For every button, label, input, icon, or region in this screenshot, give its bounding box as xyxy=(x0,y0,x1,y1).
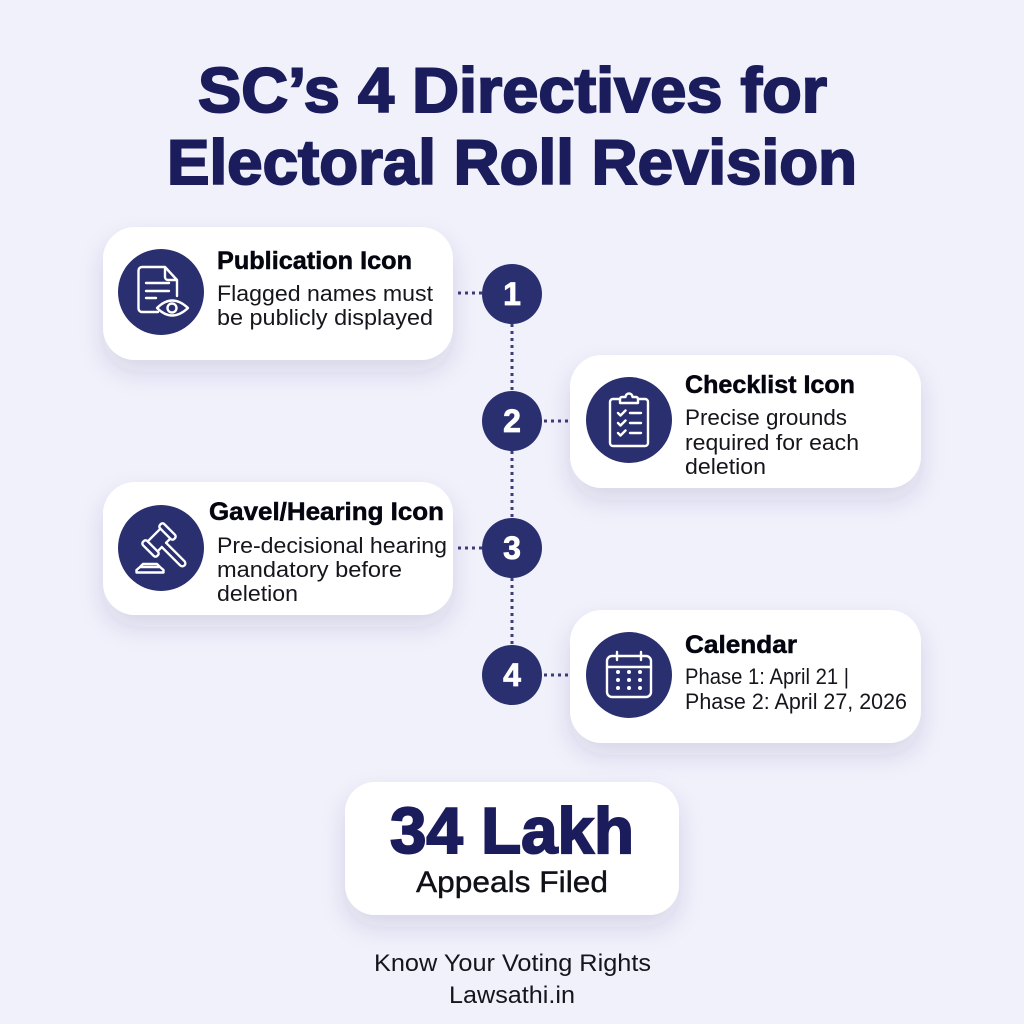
heading: Publication Icon xyxy=(217,247,412,275)
description: Phase 2: April 27, 2026 xyxy=(685,689,907,714)
title xyxy=(167,56,857,198)
step number 1 xyxy=(482,264,542,324)
description xyxy=(217,281,433,330)
description: be publicly displayed xyxy=(217,305,433,330)
panel: hearing xyxy=(103,482,453,615)
description: required for each xyxy=(685,430,859,455)
icon: document with eye xyxy=(118,249,204,335)
step number 2 xyxy=(482,391,542,451)
description: deletion xyxy=(217,581,298,606)
heading: Checklist Icon xyxy=(685,371,855,399)
heading: Calendar xyxy=(685,631,797,659)
description: mandatory before xyxy=(217,557,402,582)
description: Phase 1: April 21 | xyxy=(685,664,849,689)
step number 2: 2 xyxy=(503,403,521,439)
footer text: Lawsathi.in xyxy=(449,982,575,1009)
panel: appeals stat xyxy=(345,782,679,915)
step number 4: 4 xyxy=(503,657,521,693)
title: Electoral Roll Revision xyxy=(167,128,857,198)
stat label: Appeals Filed xyxy=(416,866,608,899)
stat number: 34 Lakh xyxy=(390,794,634,867)
step number 3: 3 xyxy=(503,530,521,566)
description: Flagged names must xyxy=(217,281,433,306)
icon: calendar xyxy=(586,632,672,718)
timeline connector xyxy=(458,293,570,675)
panel: calendar xyxy=(570,610,921,743)
footer text xyxy=(374,950,651,1009)
description: Precise grounds xyxy=(685,405,847,430)
description xyxy=(685,664,907,714)
description xyxy=(217,533,447,606)
description: Pre-decisional hearing xyxy=(217,533,447,558)
panel: publication xyxy=(103,227,453,360)
step number 1: 1 xyxy=(503,276,521,312)
step number 3 xyxy=(482,518,542,578)
footer text: Know Your Voting Rights xyxy=(374,950,651,977)
description xyxy=(685,405,859,479)
heading: Gavel/Hearing Icon xyxy=(209,498,444,526)
description: deletion xyxy=(685,454,766,479)
icon: clipboard checklist xyxy=(586,377,672,463)
title: SC’s 4 Directives for xyxy=(198,56,827,126)
step number 4 xyxy=(482,645,542,705)
icon: gavel xyxy=(118,505,204,591)
panel: checklist xyxy=(570,355,921,488)
